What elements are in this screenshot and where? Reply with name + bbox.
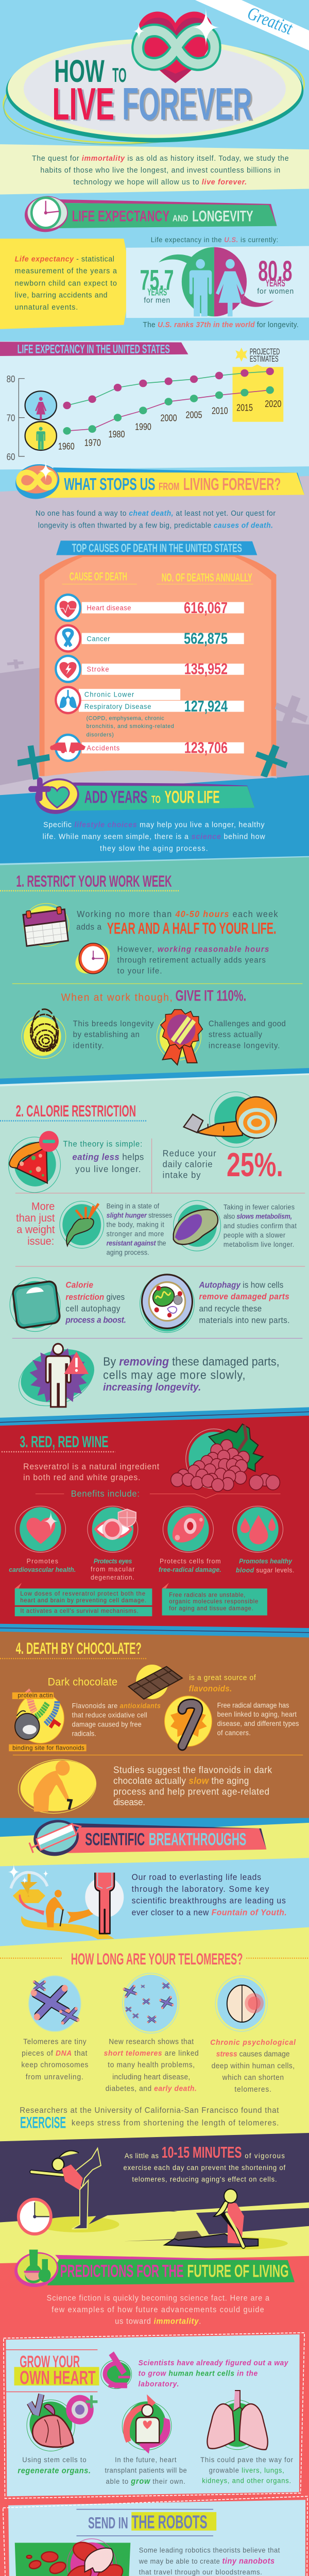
text: ten to fifteen minutes: exercise each day can prevent the shortening of	[124, 2163, 285, 2172]
text: nanobots	[139, 2546, 280, 2576]
text: studies suggest: process and help prevent age-related	[113, 1786, 269, 1797]
text: ten to fifteen minutes: As little as	[125, 2152, 159, 2160]
text: telomeres definition: pieces of DNA that	[22, 2049, 88, 2058]
text: more than just a weight issue: issue:	[27, 1235, 54, 1247]
icon: blood drops	[233, 1506, 283, 1552]
text: stem cells: regenerate organs.	[18, 2466, 91, 2476]
text: studies suggest	[113, 1765, 272, 1807]
illustration: standing yoga pose	[31, 2148, 177, 2232]
ground wave	[40, 770, 277, 792]
text: chronic stress: deep within human cells,	[212, 2062, 295, 2070]
icon: brain	[215, 1976, 267, 2031]
section: chocolate and breakthroughs	[0, 1639, 309, 1968]
text: grow heart cells	[139, 2359, 288, 2388]
row: stroke: 135,952	[184, 660, 228, 678]
panel: grow your own heart: OWN HEART	[20, 2367, 96, 2388]
text: road to everlasting life	[132, 1873, 287, 1918]
text: good stress: Challenges and good	[209, 1020, 286, 1028]
text: benefits include: Benefits include:	[71, 1488, 140, 1499]
text: lifestyle choices intro: they slow the aging process.	[100, 844, 208, 853]
text: chronic stress: telomeres.	[234, 2086, 271, 2094]
icon: heart with infinity	[133, 7, 220, 83]
text: benefits labels	[9, 1557, 294, 1581]
panel: grow your own heart	[4, 2333, 304, 2498]
icon: elderly figure	[16, 1755, 98, 1817]
line chart: 1960	[58, 441, 75, 452]
text: slight hunger: slight hunger stresses	[107, 1211, 173, 1219]
icon: chromosomes small	[123, 1973, 179, 2033]
text: eating less: The theory is simple:	[63, 1140, 142, 1148]
section header: what stops us: FROM	[159, 481, 179, 493]
row: stroke	[56, 656, 244, 682]
callout: definition: measurement of the years a	[15, 267, 117, 276]
text: ten to fifteen minutes: of vigorous	[245, 2152, 285, 2160]
greatist ribbon: Greatist	[245, 3, 296, 39]
title: HOW	[54, 53, 105, 89]
text: short telomeres	[104, 2038, 199, 2093]
line chart: 1980	[108, 429, 125, 439]
text: short telomeres: diabetes, and early death.	[106, 2084, 197, 2093]
text: autophagy definition: and recycle these	[199, 1304, 262, 1313]
heading: death by chocolate: 4. DEATH BY CHOCOLATE?	[16, 1639, 142, 1657]
chart heading	[0, 342, 188, 356]
text: benefits labels: from macular	[91, 1566, 134, 1573]
text: antioxidants: Flavonoids are antioxidants	[72, 1702, 161, 1710]
icon: tape measure	[184, 1092, 277, 1147]
text: science fiction intro: Science fiction is quickly becoming science fact. Here are a	[47, 2294, 270, 2302]
text: studies suggest: chocolate actually slow the aging	[113, 1775, 249, 1786]
icon: transplant	[122, 2394, 171, 2453]
text: lifestyle choices intro	[43, 821, 265, 853]
row: chronic lower respiratory disease: 127,924	[184, 698, 228, 715]
text: telomeres definition: from unraveling.	[26, 2073, 83, 2081]
section header: predictions: PREDICTIONS FOR THE	[60, 2262, 184, 2281]
text: slight hunger: aging process.	[107, 1248, 149, 1257]
text: ten to fifteen minutes: 10-15 MINUTES	[162, 2144, 242, 2161]
text: stem cells	[18, 2456, 293, 2486]
text: exercise finding: Researchers at the University of California-San Francisco found that	[20, 2106, 279, 2115]
text: give it 110 percent: GIVE IT 110%.	[176, 988, 246, 1005]
text: nanobots: we may be able to create tiny nanobots	[139, 2557, 274, 2566]
text: life expectancy intro: Life expectancy in the U.S. is currently:	[151, 236, 278, 244]
section header: scientific breakthroughs	[29, 1817, 266, 1859]
row: accidents: 123,706	[184, 739, 228, 757]
icon: mitochondrion	[174, 1200, 221, 1251]
text: slows metabolism: Taking in fewer calories	[224, 1203, 295, 1211]
callout: resveratrol: It activates a cell's survival mechanisms.	[20, 1608, 139, 1615]
text: working reasonable hours	[117, 945, 269, 976]
text: grow heart cells: laboratory.	[139, 2380, 179, 2388]
text: road to everlasting life: scientific breakthroughs are leading us	[132, 1896, 286, 1906]
text: antioxidants: that reduce oxidative cell	[72, 1711, 147, 1719]
icon: protected eye	[88, 1506, 138, 1552]
text: calorie restriction gives autophagy a boost: Calorie	[65, 1281, 93, 1290]
text: benefits labels: cardiovascular health.	[9, 1566, 76, 1573]
text: chronic stress: stress causes damage	[216, 2050, 290, 2059]
text: nanobots: Some leading robotics theorists believe that	[139, 2546, 280, 2554]
row: chronic lower respiratory disease: disorders)	[87, 732, 114, 738]
text: road to everlasting life: through the laboratory. Some key	[132, 1884, 269, 1894]
text: working reasonable hours: through retirement actually adds years	[117, 956, 266, 965]
text: antioxidants	[72, 1702, 161, 1737]
callout: resveratrol: heart and brain by preventing cell damage.	[20, 1598, 146, 1604]
text: slight hunger: Being in a state of	[107, 1202, 160, 1210]
text: nanobots: that travel through our bloodstreams.	[139, 2568, 262, 2576]
text: grow heart cells: to grow human heart cells in the	[139, 2369, 258, 2378]
text: free radical damage	[217, 1701, 299, 1737]
row: stroke: Stroke	[87, 665, 109, 673]
icon: exercise clock	[17, 2198, 53, 2235]
text: US rank: The U.S. ranks 37th in the world for longevity.	[143, 321, 299, 329]
text: calorie restriction gives autophagy a boost: cell autophagy	[65, 1304, 121, 1314]
text: benefits labels: free-radical damage.	[159, 1566, 221, 1573]
line chart: 2005	[185, 410, 202, 420]
panel: men and women	[126, 246, 309, 318]
text: cheat death intro: No one has found a way to cheat death, at least not yet. Our quest for	[36, 510, 276, 518]
callout: definition: Life expectancy - statistical	[15, 255, 114, 263]
line chart: 1970	[84, 437, 101, 448]
text: slight hunger: stronger and more	[107, 1230, 164, 1238]
text: good stress: increase longevity.	[209, 1041, 280, 1050]
heading: red red wine: 3. RED, RED WINE	[20, 1432, 108, 1451]
section header: add years: TO	[151, 794, 161, 806]
line chart: 70	[7, 413, 15, 423]
text: benefits labels: Promotes healthy	[239, 1557, 293, 1565]
text: cheat death intro: longevity is often thwarted by a few big, predictable causes of death.	[38, 521, 273, 530]
text: cheat death intro	[36, 510, 276, 530]
title: LIVE	[54, 80, 116, 131]
section: grow heart and robots	[3, 2333, 307, 2576]
text: autophagy definition: remove damaged parts	[199, 1293, 289, 1301]
text: more than just a weight issue	[16, 1200, 55, 1247]
panel: send in the robots	[3, 2496, 307, 2576]
callout: definition: unnatural events.	[15, 303, 78, 312]
icon: scale	[10, 1278, 61, 1331]
panel: send in the robots: THE ROBOTS	[132, 2512, 208, 2533]
text: identity: This breeds longevity	[73, 1020, 154, 1028]
text: autophagy definition: Autophagy is how cells	[199, 1281, 283, 1290]
illustration: nanobot in bloodstream	[15, 2539, 130, 2576]
text: benefits labels: Protects cells from	[160, 1557, 221, 1565]
illustration: floor yoga pose	[124, 2189, 309, 2250]
text: road to everlasting life: ever closer to a new Fountain of Youth.	[132, 1908, 287, 1918]
icon: pizza	[8, 1131, 60, 1193]
row: chronic lower respiratory disease: Chronic Lower	[84, 690, 134, 699]
callout: definition: newborn child can expect to	[15, 279, 117, 287]
section header: life expectancy and longevity: LONGEVITY	[192, 208, 253, 225]
text: reduce calories 25 percent: 25%.	[227, 1146, 283, 1184]
section header: what stops us: WHAT STOPS US	[64, 474, 156, 494]
panel: men and women: 75.7	[140, 264, 174, 296]
text: lifestyle choices intro: Specific lifestyle choices may help you live a longer, healthy	[43, 821, 265, 829]
line chart: 2010	[212, 405, 228, 416]
text: benefits labels: Promotes	[27, 1557, 58, 1565]
callout: free radicals: for aging and tissue damage.	[169, 1605, 253, 1612]
icon: fingerprint	[22, 1009, 66, 1059]
section header: add years: ADD YEARS	[84, 787, 147, 807]
icon: calendar	[23, 903, 69, 946]
text: flavonoids	[189, 1674, 256, 1693]
text: slows metabolism: metabolism live longer.	[224, 1241, 294, 1248]
text: benefits labels: blood sugar levels.	[236, 1567, 294, 1574]
text: short telomeres: New research shows that	[109, 2038, 194, 2046]
text: removing damaged parts: By removing these damaged parts,	[103, 1355, 280, 1368]
text: work hours: Working no more than 40-50 hours each week	[77, 909, 278, 919]
title: TO	[112, 64, 127, 87]
text: exercise finding: EXERCISE	[20, 2113, 66, 2132]
greatist ribbon	[195, 0, 309, 50]
text: reduce calories 25 percent: daily calorie	[163, 1159, 212, 1169]
row: cancer: Cancer	[87, 635, 110, 643]
text: free radical damage: of cancers.	[217, 1729, 251, 1737]
section header: life expectancy and longevity	[23, 194, 277, 234]
icon: damaged person	[12, 1340, 100, 1415]
icon: chromosomes large	[29, 1976, 81, 2031]
icon: autophagy cell	[140, 1275, 194, 1333]
text: telomeres definition: keep chromosomes	[21, 2061, 88, 2070]
intro text: habits of those who live the longest, and invest countless billions in	[40, 166, 280, 175]
text: slight hunger	[107, 1202, 173, 1257]
row: heart disease: 616,067	[184, 599, 228, 617]
text: stem cells: able to grow their own.	[106, 2477, 185, 2486]
row: chronic lower respiratory disease: bronchitis, and smoking-related	[87, 723, 174, 730]
row: cancer	[56, 625, 244, 651]
line chart: 60	[7, 452, 15, 462]
text: lifestyle choices intro: life. While many seem simple, there is a science behind how	[43, 833, 265, 841]
text: chronic stress	[210, 2039, 296, 2094]
text: ten to fifteen minutes	[124, 2144, 285, 2183]
text: stem cells: Using stem cells to	[22, 2456, 87, 2464]
panel: men and women: for men	[144, 296, 170, 305]
text: stem cells: transplant patients will be	[105, 2466, 187, 2475]
title oval	[0, 34, 307, 156]
icon: chocolate bar	[128, 1665, 182, 1699]
callout: resveratrol: Low doses of resveratrol protect both the	[20, 1591, 145, 1597]
panel: grow your own heart: GROW YOUR	[20, 2352, 80, 2371]
text: resveratrol: in both red and white grapes.	[23, 1473, 140, 1482]
text: removing damaged parts	[103, 1355, 280, 1393]
text: antioxidants: damage caused by free	[72, 1720, 142, 1728]
text: work hours	[76, 909, 278, 938]
row: chronic lower respiratory disease: (COPD, emphysema, chronic	[87, 715, 164, 722]
line chart: ESTIMATES	[250, 355, 279, 364]
callout: definition: live, barring accidents and	[15, 291, 108, 300]
intro text: technology we hope will allow us to live forever.	[73, 178, 247, 187]
row: cancer: 562,875	[184, 630, 228, 648]
section header: predictions	[12, 2249, 295, 2290]
text: give it 110 percent	[61, 988, 246, 1005]
text: studies suggest: Studies suggest the flavonoids in dark	[113, 1765, 272, 1775]
text: resveratrol: Resveratrol is a natural ingredient	[23, 1462, 160, 1471]
text: road to everlasting life: Our road to everlasting life leads	[132, 1873, 261, 1882]
text: eating less: you live longer.	[75, 1164, 141, 1174]
line chart: 2000	[160, 413, 177, 423]
panel: men and women: YEARS	[266, 278, 285, 289]
icon: faint crosses	[7, 659, 308, 727]
panel: top causes of death: NO. OF DEATHS ANNUALLY	[162, 571, 252, 584]
text: more than just a weight issue: a weight	[16, 1224, 55, 1236]
row: chronic lower respiratory disease: Respiratory Disease	[84, 703, 151, 710]
row: accidents: Accidents	[87, 744, 120, 752]
text: free radical damage: been linked to aging, heart	[217, 1710, 297, 1718]
row: heart disease	[56, 595, 244, 621]
text: slight hunger: the body, making it	[107, 1221, 164, 1229]
chart heading: LIFE EXPECTANCY IN THE UNITED STATES	[18, 342, 170, 356]
text: stem cells: kidneys, and other organs.	[202, 2477, 291, 2485]
text: short telomeres: including heart disease,	[112, 2073, 190, 2081]
row: heart disease: Heart disease	[87, 604, 131, 612]
heading: calorie restriction: 2. CALORIE RESTRICTION	[16, 1101, 136, 1120]
section: longevity and red wine	[2, 1338, 302, 1616]
text: give it 110 percent: When at work though,	[61, 992, 173, 1004]
callout: free radicals: organic molecules responsible	[169, 1599, 258, 1605]
text: stem cells: growable livers, lungs,	[209, 2466, 284, 2475]
text: chronic stress: Chronic psychological	[210, 2039, 296, 2047]
panel: men and women: YEARS	[147, 287, 167, 298]
line chart: 2020	[265, 398, 281, 409]
text: good stress: stress actually	[209, 1030, 262, 1039]
text: free radical damage: disease, and different types	[217, 1720, 299, 1727]
text: studies suggest: disease.	[113, 1797, 145, 1807]
section: give it 110 and calories	[0, 988, 305, 1333]
callout: resveratrol	[15, 1583, 152, 1616]
icon: grapes	[171, 1424, 280, 1492]
section header: life expectancy and longevity: LIFE EXPECTANCY	[72, 208, 169, 225]
text: slight hunger: resistant against the	[107, 1239, 166, 1247]
text: benefits labels: degeneration.	[91, 1574, 134, 1581]
icon: cardiovascular heart	[15, 1506, 65, 1552]
text: benefits labels: Protects eyes	[94, 1557, 132, 1565]
text: stem cells: This could pave the way for	[200, 2456, 293, 2464]
intro text: The quest for immortality is as old as history itself. Today, we study the	[32, 155, 289, 163]
icon: lungs	[207, 2391, 268, 2450]
text: more than just a weight issue: More	[31, 1200, 55, 1213]
row: accidents	[50, 735, 244, 761]
text: science fiction intro: few examples of how future advancements could guide	[52, 2306, 264, 2314]
text: ten to fifteen minutes: telomeres, reducing aging's effect on cells.	[132, 2175, 277, 2183]
text: slows metabolism: people with a slower	[224, 1231, 286, 1239]
text: stem cells: In the future, heart	[115, 2456, 177, 2464]
panel: top causes of death	[0, 540, 309, 785]
line chart: PROJECTED	[250, 348, 280, 357]
section header: add years: YOUR LIFE	[165, 787, 220, 807]
text: working reasonable hours: However, working reasonable hours	[117, 945, 269, 954]
intro text	[32, 155, 289, 187]
heading: restrict your work week: 1. RESTRICT YOUR WORK WEEK	[16, 872, 172, 890]
icon: protected cell	[163, 1506, 213, 1552]
text: short telomeres: short telomeres are linked	[104, 2049, 199, 2058]
panel: send in the robots: SEND IN	[88, 2514, 128, 2532]
section header: what stops us	[13, 461, 304, 502]
text: science fiction intro: us toward immortality.	[115, 2317, 201, 2326]
text: work hours: adds a	[76, 923, 101, 932]
text: removing damaged parts: increasing longevity.	[103, 1381, 201, 1393]
icon: protein actin: protein actin	[18, 1691, 53, 1699]
icon: heart and stem cell	[27, 2394, 97, 2451]
text: slows metabolism: and studies confirm that	[224, 1222, 297, 1230]
icon: protein actin: binding site for flavonoids	[12, 1744, 84, 1752]
text: free radical damage: Free radical damage has	[217, 1701, 289, 1709]
section: header and life expectancy	[0, 0, 309, 329]
text: dark chocolate: Dark chocolate	[48, 1676, 117, 1688]
text: exercise finding: keeps stress from shortening the length of telomeres.	[72, 2119, 279, 2128]
illustration: fountain of youth	[8, 1863, 124, 1939]
icon: clock	[71, 939, 114, 979]
text: slows metabolism	[224, 1203, 297, 1248]
text: flavonoids: flavonoids.	[189, 1684, 232, 1693]
callout: free radicals: Free radicals are unstable,	[169, 1592, 245, 1599]
text: reduce calories 25 percent: intake by	[163, 1170, 201, 1180]
section header: add years	[31, 775, 254, 817]
text: identity	[73, 1020, 154, 1050]
text: calorie restriction gives autophagy a boost	[65, 1281, 126, 1325]
text: short telomeres: to many health problems,	[108, 2061, 195, 2070]
text: grow heart cells: Scientists have already figured out a way	[139, 2359, 288, 2367]
section header: scientific breakthroughs: BREAKTHROUGHS	[149, 1830, 246, 1850]
icon: crosses	[18, 744, 288, 779]
section: telomeres and exercise	[12, 1973, 309, 2326]
text: more than just a weight issue: than just	[16, 1212, 55, 1224]
line chart	[7, 348, 283, 462]
icon: microscope	[101, 2353, 132, 2388]
line chart: 1990	[135, 421, 151, 432]
text: antioxidants: radicals.	[72, 1730, 96, 1737]
text: telomeres definition	[21, 2038, 88, 2081]
callout: definition	[0, 239, 132, 329]
section: chart and causes of death	[0, 342, 309, 785]
callout: free radicals	[162, 1583, 267, 1616]
section header: life expectancy and longevity: AND	[173, 213, 188, 224]
text: removing damaged parts: cells may age more slowly,	[103, 1368, 245, 1381]
text: identity: by establishing an	[73, 1030, 140, 1039]
line chart: 2015	[236, 402, 253, 413]
row: chronic lower respiratory disease	[56, 687, 244, 738]
title: LIVE	[52, 78, 114, 129]
panel: men and women: for women	[257, 287, 294, 296]
text: autophagy definition: materials into new parts.	[199, 1316, 289, 1325]
icon: award ribbon	[157, 1010, 202, 1065]
text: working reasonable hours: to your life.	[117, 967, 162, 976]
title	[52, 53, 254, 131]
text: chronic stress: which can shorten	[222, 2074, 284, 2082]
text: benefits include	[36, 1488, 281, 1499]
panel: top causes of death: CAUSE OF DEATH	[70, 570, 127, 583]
icon: beet	[60, 1201, 104, 1248]
text: good stress	[209, 1020, 286, 1050]
icon: cane	[165, 1696, 212, 1747]
text: autophagy definition	[199, 1281, 289, 1325]
text: exercise finding	[20, 2106, 279, 2132]
text: identity: identity.	[73, 1041, 104, 1050]
text: slows metabolism: also slows metabolism,	[224, 1212, 292, 1221]
text: resveratrol	[23, 1462, 160, 1482]
text: reduce calories 25 percent	[163, 1146, 283, 1184]
text: calorie restriction gives autophagy a boost: restriction gives	[65, 1293, 125, 1302]
section: causes continued and lifestyle	[0, 656, 308, 984]
text: science fiction intro	[47, 2294, 270, 2326]
section header: scientific breakthroughs: SCIENTIFIC	[85, 1830, 145, 1850]
text: telomeres definition: Telomeres are tiny	[23, 2038, 87, 2046]
text: reduce calories 25 percent: Reduce your	[163, 1148, 216, 1159]
icon: protein actin	[9, 1691, 87, 1752]
text: eating less	[63, 1140, 144, 1174]
text: calorie restriction gives autophagy a boost: process a boost.	[65, 1316, 126, 1325]
text: eating less: eating less helps	[72, 1151, 144, 1162]
text: flavonoids: is a great source of	[189, 1674, 256, 1682]
line chart: 80	[7, 374, 15, 384]
